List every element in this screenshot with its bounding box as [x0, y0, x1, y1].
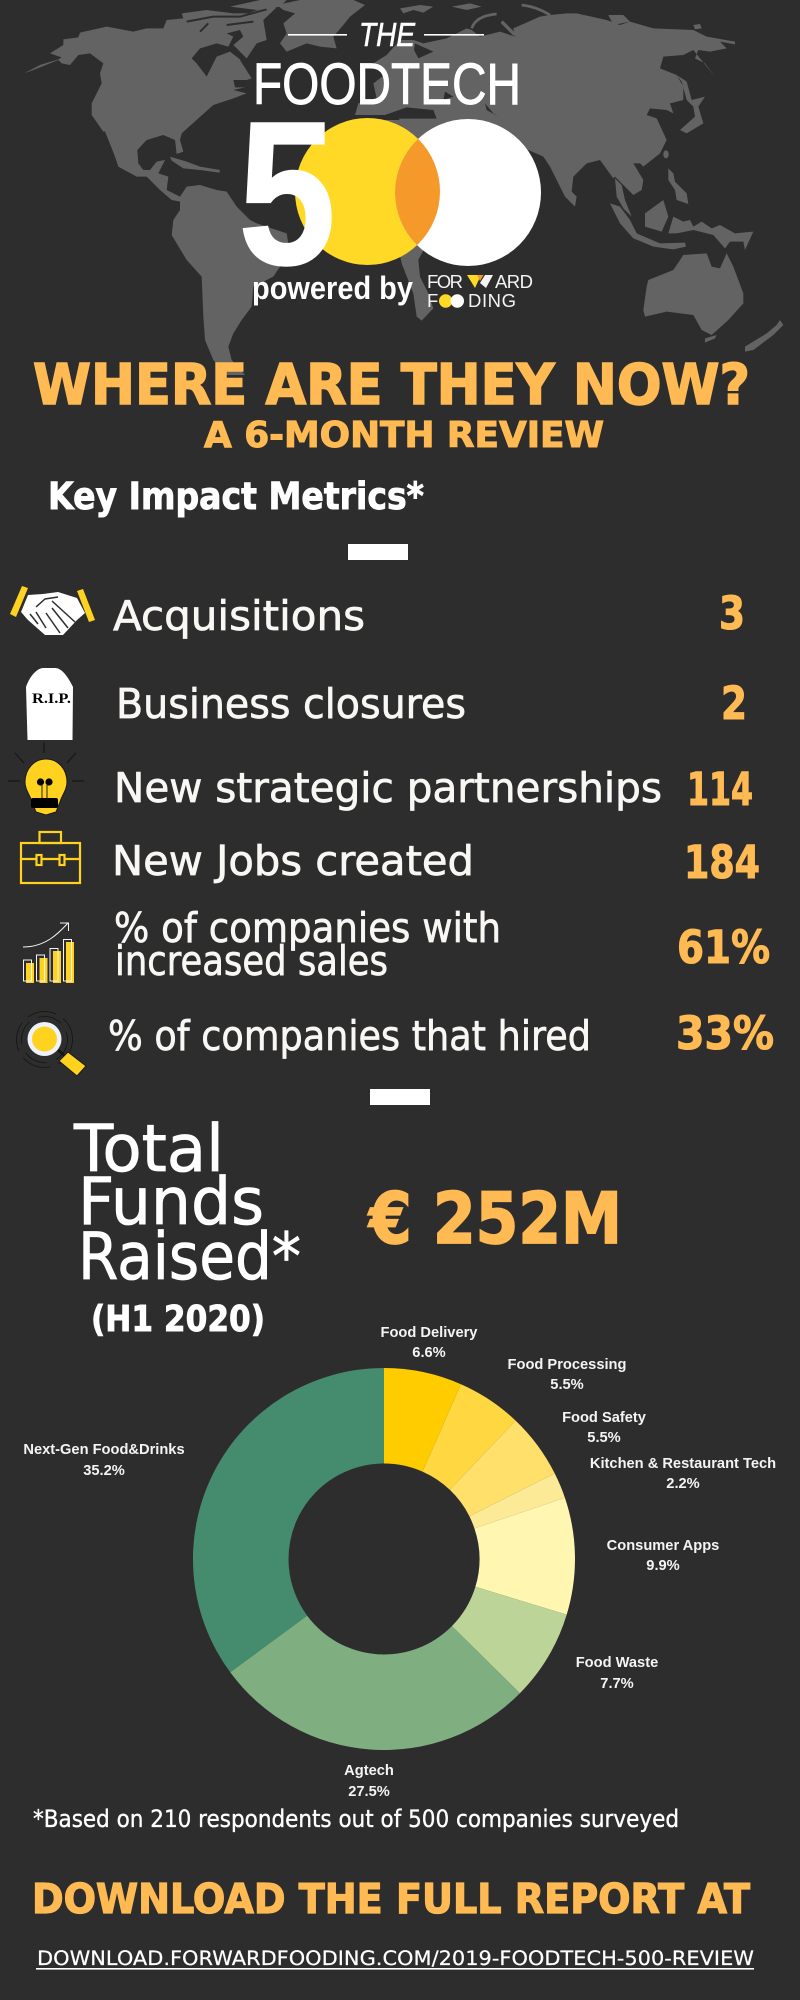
icon: R.I.P. tombstone: R.I.P.	[32, 691, 71, 707]
text: companies with increased sales: % of companies with	[114, 904, 501, 952]
chart labels: 6.6%	[412, 1345, 446, 1361]
period label: (H1 2020)	[91, 1299, 265, 1340]
metric: acquisitions: Acquisitions	[113, 592, 365, 640]
chart labels: 35.2%	[83, 1463, 125, 1479]
powered by: powered by	[252, 270, 413, 306]
icon: R.I.P. tombstone	[26, 668, 73, 740]
text: companies with increased sales: increased sales	[115, 937, 388, 985]
subtitle: A 6-MONTH REVIEW	[204, 415, 604, 456]
metric: business closures	[26, 668, 747, 740]
text: companies with increased sales	[114, 904, 501, 985]
map: americas	[24, 0, 365, 375]
icon: handshake	[10, 586, 95, 635]
map: eurasia, africa and oceania	[355, 3, 783, 352]
metric: companies that hired: % of companies that hired	[108, 1012, 591, 1060]
metric: strategic partnerships: New strategic partnerships	[114, 764, 662, 812]
metric: acquisitions: 3	[719, 587, 745, 640]
logo heading: THE: THE	[359, 16, 416, 53]
metric: business closures: 2	[721, 677, 747, 730]
title: WHERE ARE THEY NOW?	[33, 353, 750, 418]
Forward Fooding wordmark: DING	[468, 290, 516, 311]
Forward Fooding wordmark	[427, 271, 533, 311]
Forward Fooding wordmark: FOR	[427, 271, 463, 292]
donut chart	[193, 1368, 575, 1750]
call to action: DOWNLOAD THE FULL REPORT AT	[32, 1875, 750, 1923]
metric: strategic partnerships	[8, 742, 753, 816]
metric: strategic partnerships: 114	[687, 763, 753, 816]
heading: total funds raised	[73, 1112, 301, 1295]
chart labels	[23, 1325, 776, 1800]
chart labels: Kitchen & Restaurant Tech	[590, 1456, 776, 1472]
chart labels: Food Waste	[576, 1655, 658, 1671]
Forward Fooding wordmark: ARD	[495, 271, 533, 292]
metric: new jobs	[21, 832, 760, 889]
total amount: € 252M	[367, 1178, 622, 1260]
Forward Fooding wordmark: F	[427, 290, 438, 311]
metric: companies that hired	[16, 1007, 774, 1076]
chart labels: Food Safety	[562, 1410, 647, 1426]
metric: increased sales: 61%	[677, 921, 770, 974]
metrics list	[8, 586, 774, 1076]
logo number: 500 with circles: 5	[238, 79, 336, 308]
chart labels: Food Processing	[508, 1357, 626, 1373]
heading: key impact metrics: Key Impact Metrics*	[48, 475, 424, 518]
chart labels: Agtech	[344, 1763, 394, 1779]
metric: new jobs: New Jobs created	[112, 837, 474, 885]
icon: light bulb	[8, 742, 84, 815]
chart labels: Consumer Apps	[607, 1538, 719, 1554]
download link: DOWNLOAD.FORWARDFOODING.COM/2019-FOODTECH-500-REVIEW	[37, 1947, 754, 1970]
chart labels: 5.5%	[550, 1377, 584, 1393]
icon: growth bar chart	[23, 923, 74, 983]
world map background	[24, 0, 783, 375]
chart labels: 5.5%	[587, 1430, 621, 1446]
chart labels: 27.5%	[348, 1784, 390, 1800]
metric: business closures: Business closures	[116, 680, 466, 728]
chart labels: 7.7%	[600, 1676, 634, 1692]
logo number: 500 with circles	[242, 118, 541, 267]
logo: The Foodtech 500 powered by Forward Fooding	[238, 16, 541, 311]
chart labels: Next-Gen Food&Drinks	[23, 1442, 185, 1458]
metric: increased sales	[23, 904, 770, 985]
metric: new jobs: 184	[684, 836, 760, 889]
metric: acquisitions	[10, 586, 745, 640]
logo heading: FOODTECH: FOODTECH	[253, 52, 521, 117]
chart labels: 9.9%	[646, 1558, 680, 1574]
heading: total funds raised: Funds	[78, 1165, 264, 1240]
chart labels: Food Delivery	[381, 1325, 478, 1341]
heading: total funds raised: Total	[73, 1112, 224, 1187]
icon: magnifying glass	[16, 1012, 86, 1076]
icon: briefcase	[21, 832, 80, 883]
chart labels: 2.2%	[666, 1476, 700, 1492]
heading: total funds raised: Raised*	[78, 1220, 301, 1295]
metric: companies that hired: 33%	[676, 1007, 774, 1060]
footnote: *Based on 210 respondents out of 500 companies surveyed	[33, 1805, 679, 1833]
